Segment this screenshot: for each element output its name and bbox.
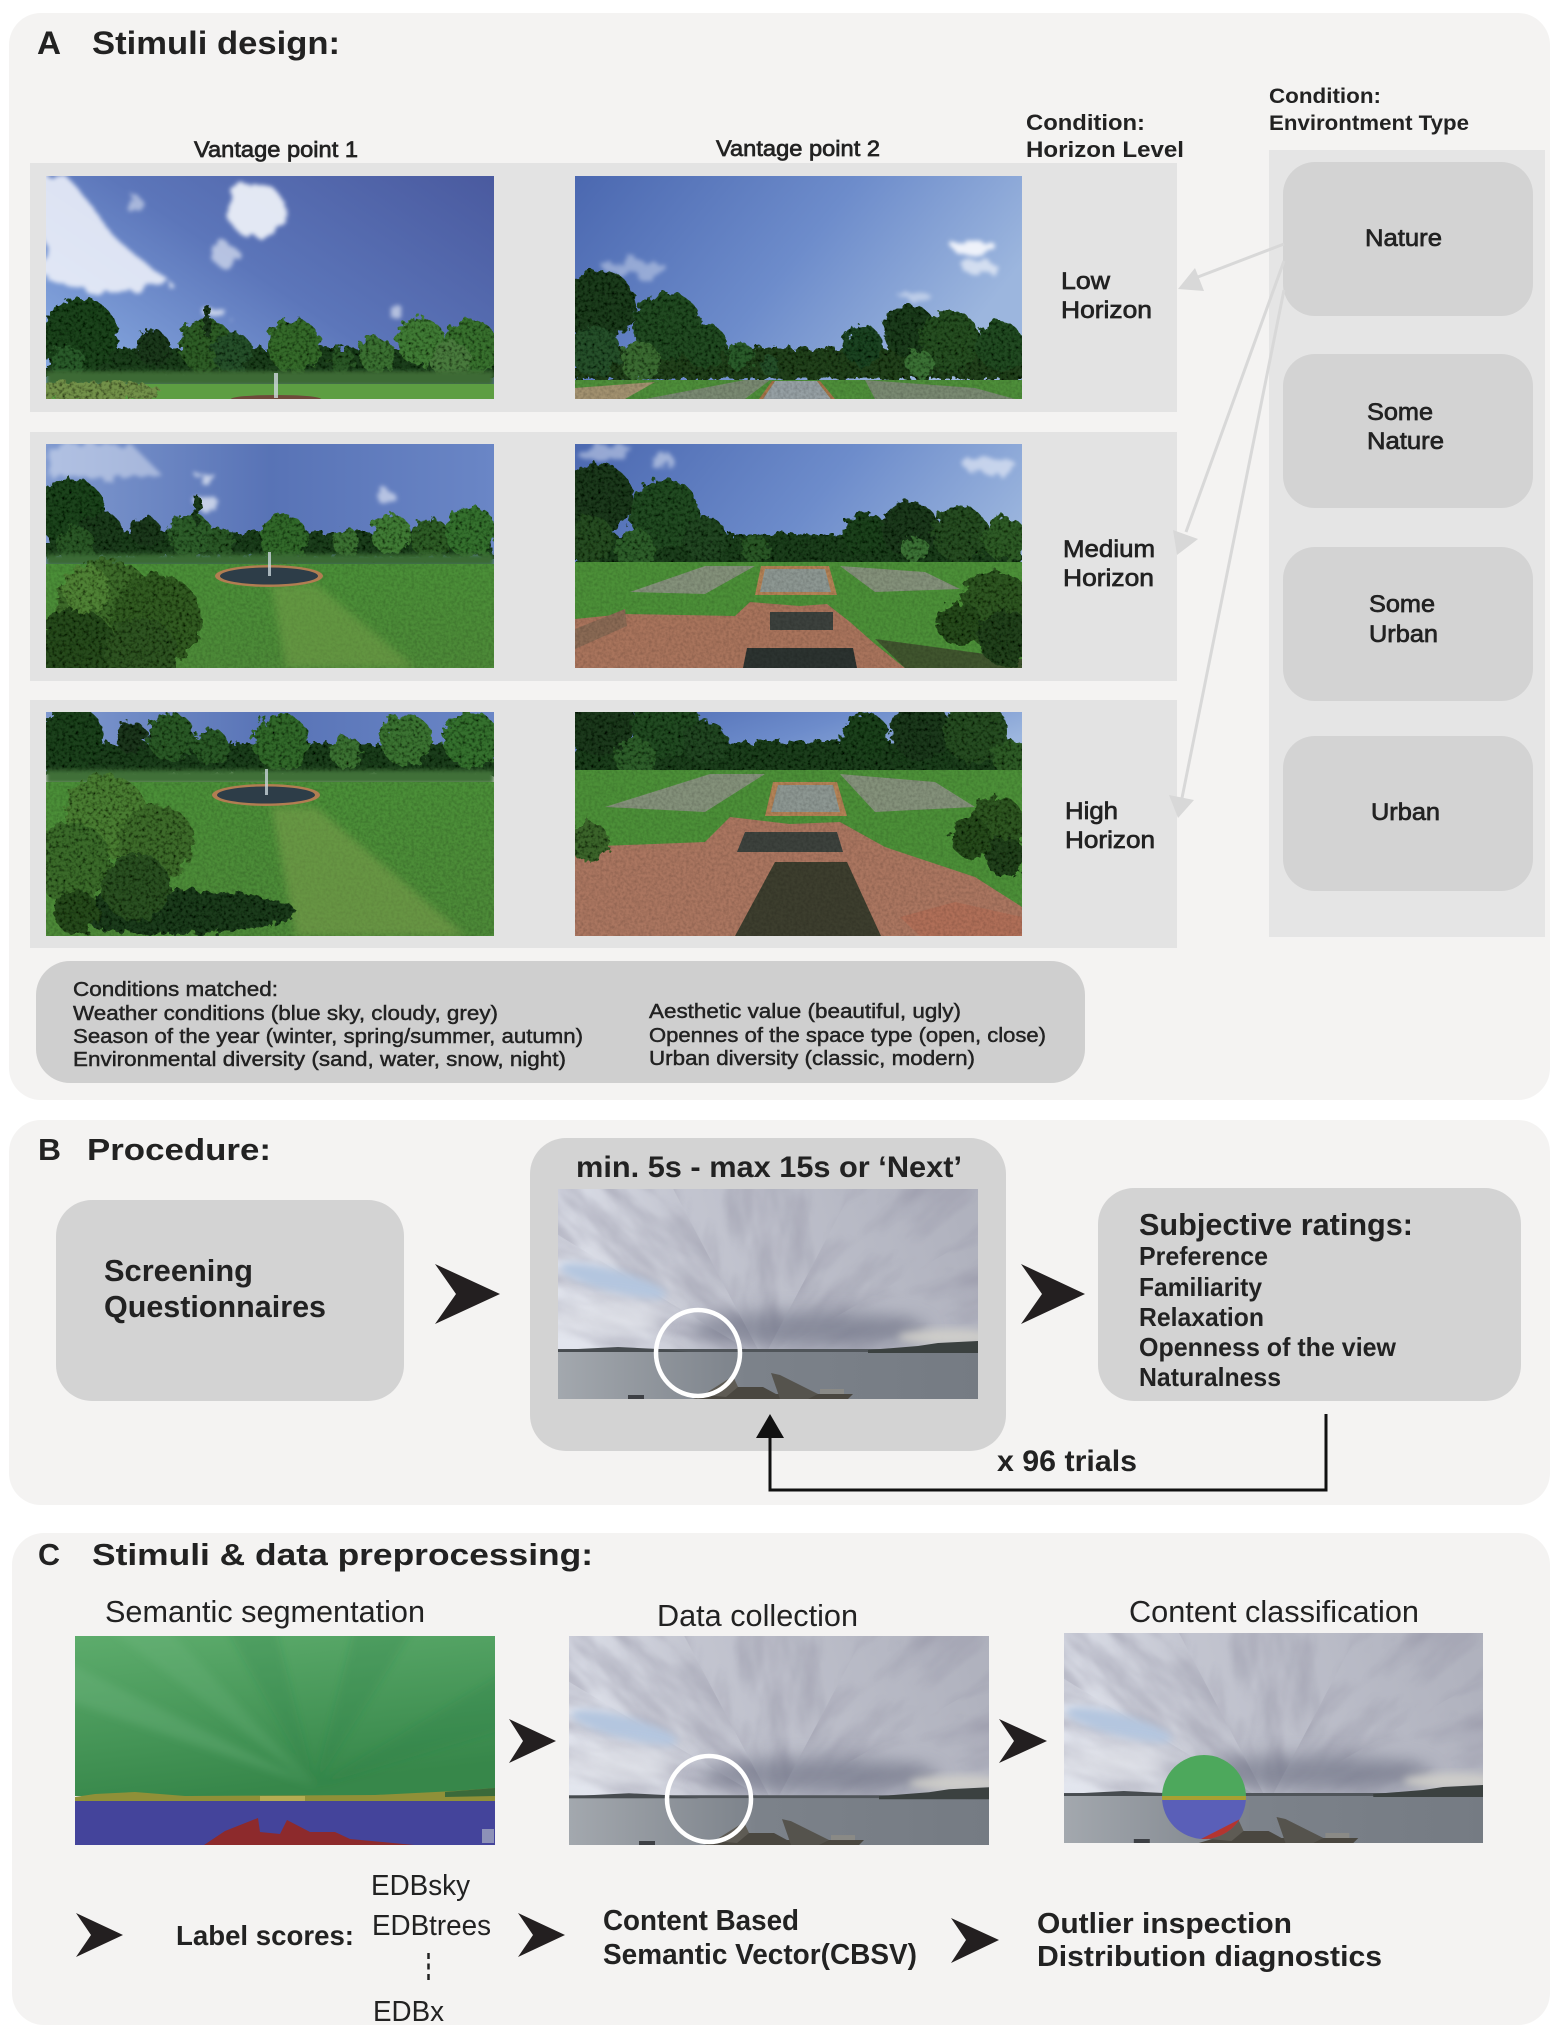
column label: vantage point 2: Vantage point 2: [716, 136, 880, 161]
panel letter C: C: [38, 1537, 60, 1572]
heading: condition environment type: Condition:: [1269, 85, 1381, 108]
callout: conditions matched: Weather conditions (blue sky, cloudy, grey): [73, 1003, 498, 1025]
image: data collection: [514, 1555, 1044, 1878]
arrow: to content classification: [999, 1719, 1047, 1763]
arrow: to stimulus: [435, 1264, 500, 1324]
heading: Stimuli design: Stimuli design:: [92, 25, 340, 61]
label: medium horizon: Horizon: [1063, 565, 1154, 592]
text: outlier inspection and diagnostics: [1037, 1908, 1382, 1973]
panel letter A: A: [37, 25, 61, 61]
row: medium horizon: [30, 432, 1177, 690]
callout: conditions matched: [36, 961, 1085, 1083]
heading: condition environment type: [1269, 85, 1469, 135]
label: low horizon: [1061, 268, 1152, 324]
arrow: nature to low horizon: [1178, 244, 1284, 291]
box: stimulus presentation: [503, 1108, 1033, 1451]
arrow: to label scores: [76, 1913, 123, 1957]
arrow: to ratings: [1021, 1264, 1085, 1324]
photo: vantage 2 medium horizon: [575, 444, 1022, 668]
box: nature: Nature: [1365, 225, 1442, 252]
list: EDB scores: EDBsky: [371, 1870, 470, 1902]
box: urban: Urban: [1371, 799, 1440, 826]
text: content based semantic vector: Semantic Vector(CBSV): [603, 1939, 917, 1971]
box: some urban: Urban: [1369, 621, 1438, 648]
box: urban: [1283, 736, 1533, 891]
row: low horizon: [21, 163, 1177, 412]
label: 96 trials: x 96 trials: [997, 1445, 1137, 1478]
heading: procedure: Procedure:: [87, 1132, 271, 1167]
callout: conditions matched: Conditions matched:: [73, 979, 278, 1001]
row: high horizon: [30, 688, 1177, 948]
label: high horizon: Horizon: [1065, 827, 1155, 854]
box: some urban: [1283, 547, 1533, 701]
box: subjective ratings: Preference: [1139, 1241, 1268, 1271]
panel letter B: B: [38, 1132, 61, 1167]
gaze circle: [667, 1756, 751, 1842]
heading: condition horizon level: [1026, 110, 1184, 162]
box: screening questionnaires: Questionnaires: [104, 1289, 326, 1324]
image: content classification: [1064, 1633, 1483, 1843]
box: some urban: Some: [1369, 591, 1435, 618]
heading: condition environment type: Environtment Type: [1269, 112, 1469, 135]
text: outlier inspection and diagnostics: Outlier inspection: [1037, 1908, 1292, 1940]
panel B: procedure: [9, 1108, 1550, 1505]
label: low horizon: Low: [1061, 268, 1111, 295]
photo: vantage 2 low horizon: [575, 176, 1022, 399]
image: segmentation map: [75, 1636, 495, 1845]
photo: cloudy lake: [503, 1108, 1033, 1432]
label: data collection: Data collection: [657, 1598, 858, 1633]
classified gaze region: [1162, 1755, 1246, 1839]
box: screening questionnaires: [56, 1200, 404, 1401]
label: high horizon: High: [1065, 798, 1118, 825]
arrow: to diagnostics: [951, 1918, 999, 1963]
list: EDB scores: EDBx: [373, 1996, 444, 2028]
box: some nature: Some: [1367, 399, 1433, 426]
photo: vantage 1 high horizon: [46, 712, 494, 936]
box: subjective ratings: Relaxation: [1139, 1302, 1264, 1332]
heading: stimuli and data preprocessing: Stimuli & data preprocessing:: [92, 1537, 593, 1572]
callout: conditions matched: Urban diversity (classic, modern): [649, 1048, 975, 1070]
label: high horizon: [1065, 798, 1155, 854]
arrow: to data collection: [509, 1719, 556, 1763]
box: subjective ratings: Naturalness: [1139, 1362, 1281, 1392]
box: subjective ratings: Subjective ratings:: [1139, 1207, 1413, 1242]
gaze circle: [656, 1310, 740, 1396]
box: stimulus presentation: min. 5s - max 15s or ‘Next’: [576, 1151, 962, 1184]
column label: vantage point 1: Vantage point 1: [194, 137, 358, 162]
list: EDB scores: [371, 1870, 491, 2028]
arrow: to semantic vector: [518, 1913, 565, 1957]
text: content based semantic vector: [603, 1905, 917, 1971]
box: subjective ratings: Familiarity: [1139, 1272, 1262, 1302]
callout: conditions matched: Opennes of the space type (open, close): [649, 1025, 1046, 1047]
label: label scores: Label scores:: [176, 1920, 354, 1951]
photo: vantage 1 medium horizon: [46, 444, 494, 668]
arrow: trial loop: [756, 1414, 1326, 1490]
text: content based semantic vector: Content Based: [603, 1905, 799, 1937]
label: low horizon: Horizon: [1061, 297, 1152, 324]
text: outlier inspection and diagnostics: Distribution diagnostics: [1037, 1941, 1382, 1973]
photo: vantage 1 low horizon: [46, 176, 494, 399]
box: screening questionnaires: Screening: [104, 1253, 253, 1288]
box: nature: [1283, 162, 1533, 316]
panel A: stimuli design: [9, 13, 1550, 1100]
callout: conditions matched: Season of the year (winter, spring/summer, autumn): [73, 1026, 583, 1048]
box: subjective ratings: [1098, 1188, 1521, 1401]
box: subjective ratings: Openness of the view: [1139, 1332, 1397, 1362]
arrow: nature to high horizon: [1169, 290, 1284, 818]
callout: conditions matched: Aesthetic value (beautiful, ugly): [649, 1001, 961, 1023]
box: some nature: [1283, 354, 1533, 508]
label: semantic segmentation: Semantic segmentation: [105, 1594, 425, 1629]
label: content classification: Content classification: [1129, 1594, 1419, 1629]
panel: environment type: [1269, 150, 1545, 937]
box: some nature: Nature: [1367, 428, 1444, 455]
arrow: nature to medium horizon: [1173, 261, 1284, 555]
list: EDB scores: EDBtrees: [372, 1910, 491, 1942]
label: medium horizon: Medium: [1063, 536, 1155, 563]
heading: condition horizon level: Condition:: [1026, 110, 1145, 135]
callout: conditions matched: Environmental diversity (sand, water, snow, night): [73, 1049, 566, 1071]
heading: condition horizon level: Horizon Level: [1026, 137, 1184, 162]
panel C: preprocessing: [12, 1533, 1550, 2028]
label: medium horizon: [1063, 536, 1155, 592]
photo: vantage 2 high horizon: [575, 712, 1022, 936]
